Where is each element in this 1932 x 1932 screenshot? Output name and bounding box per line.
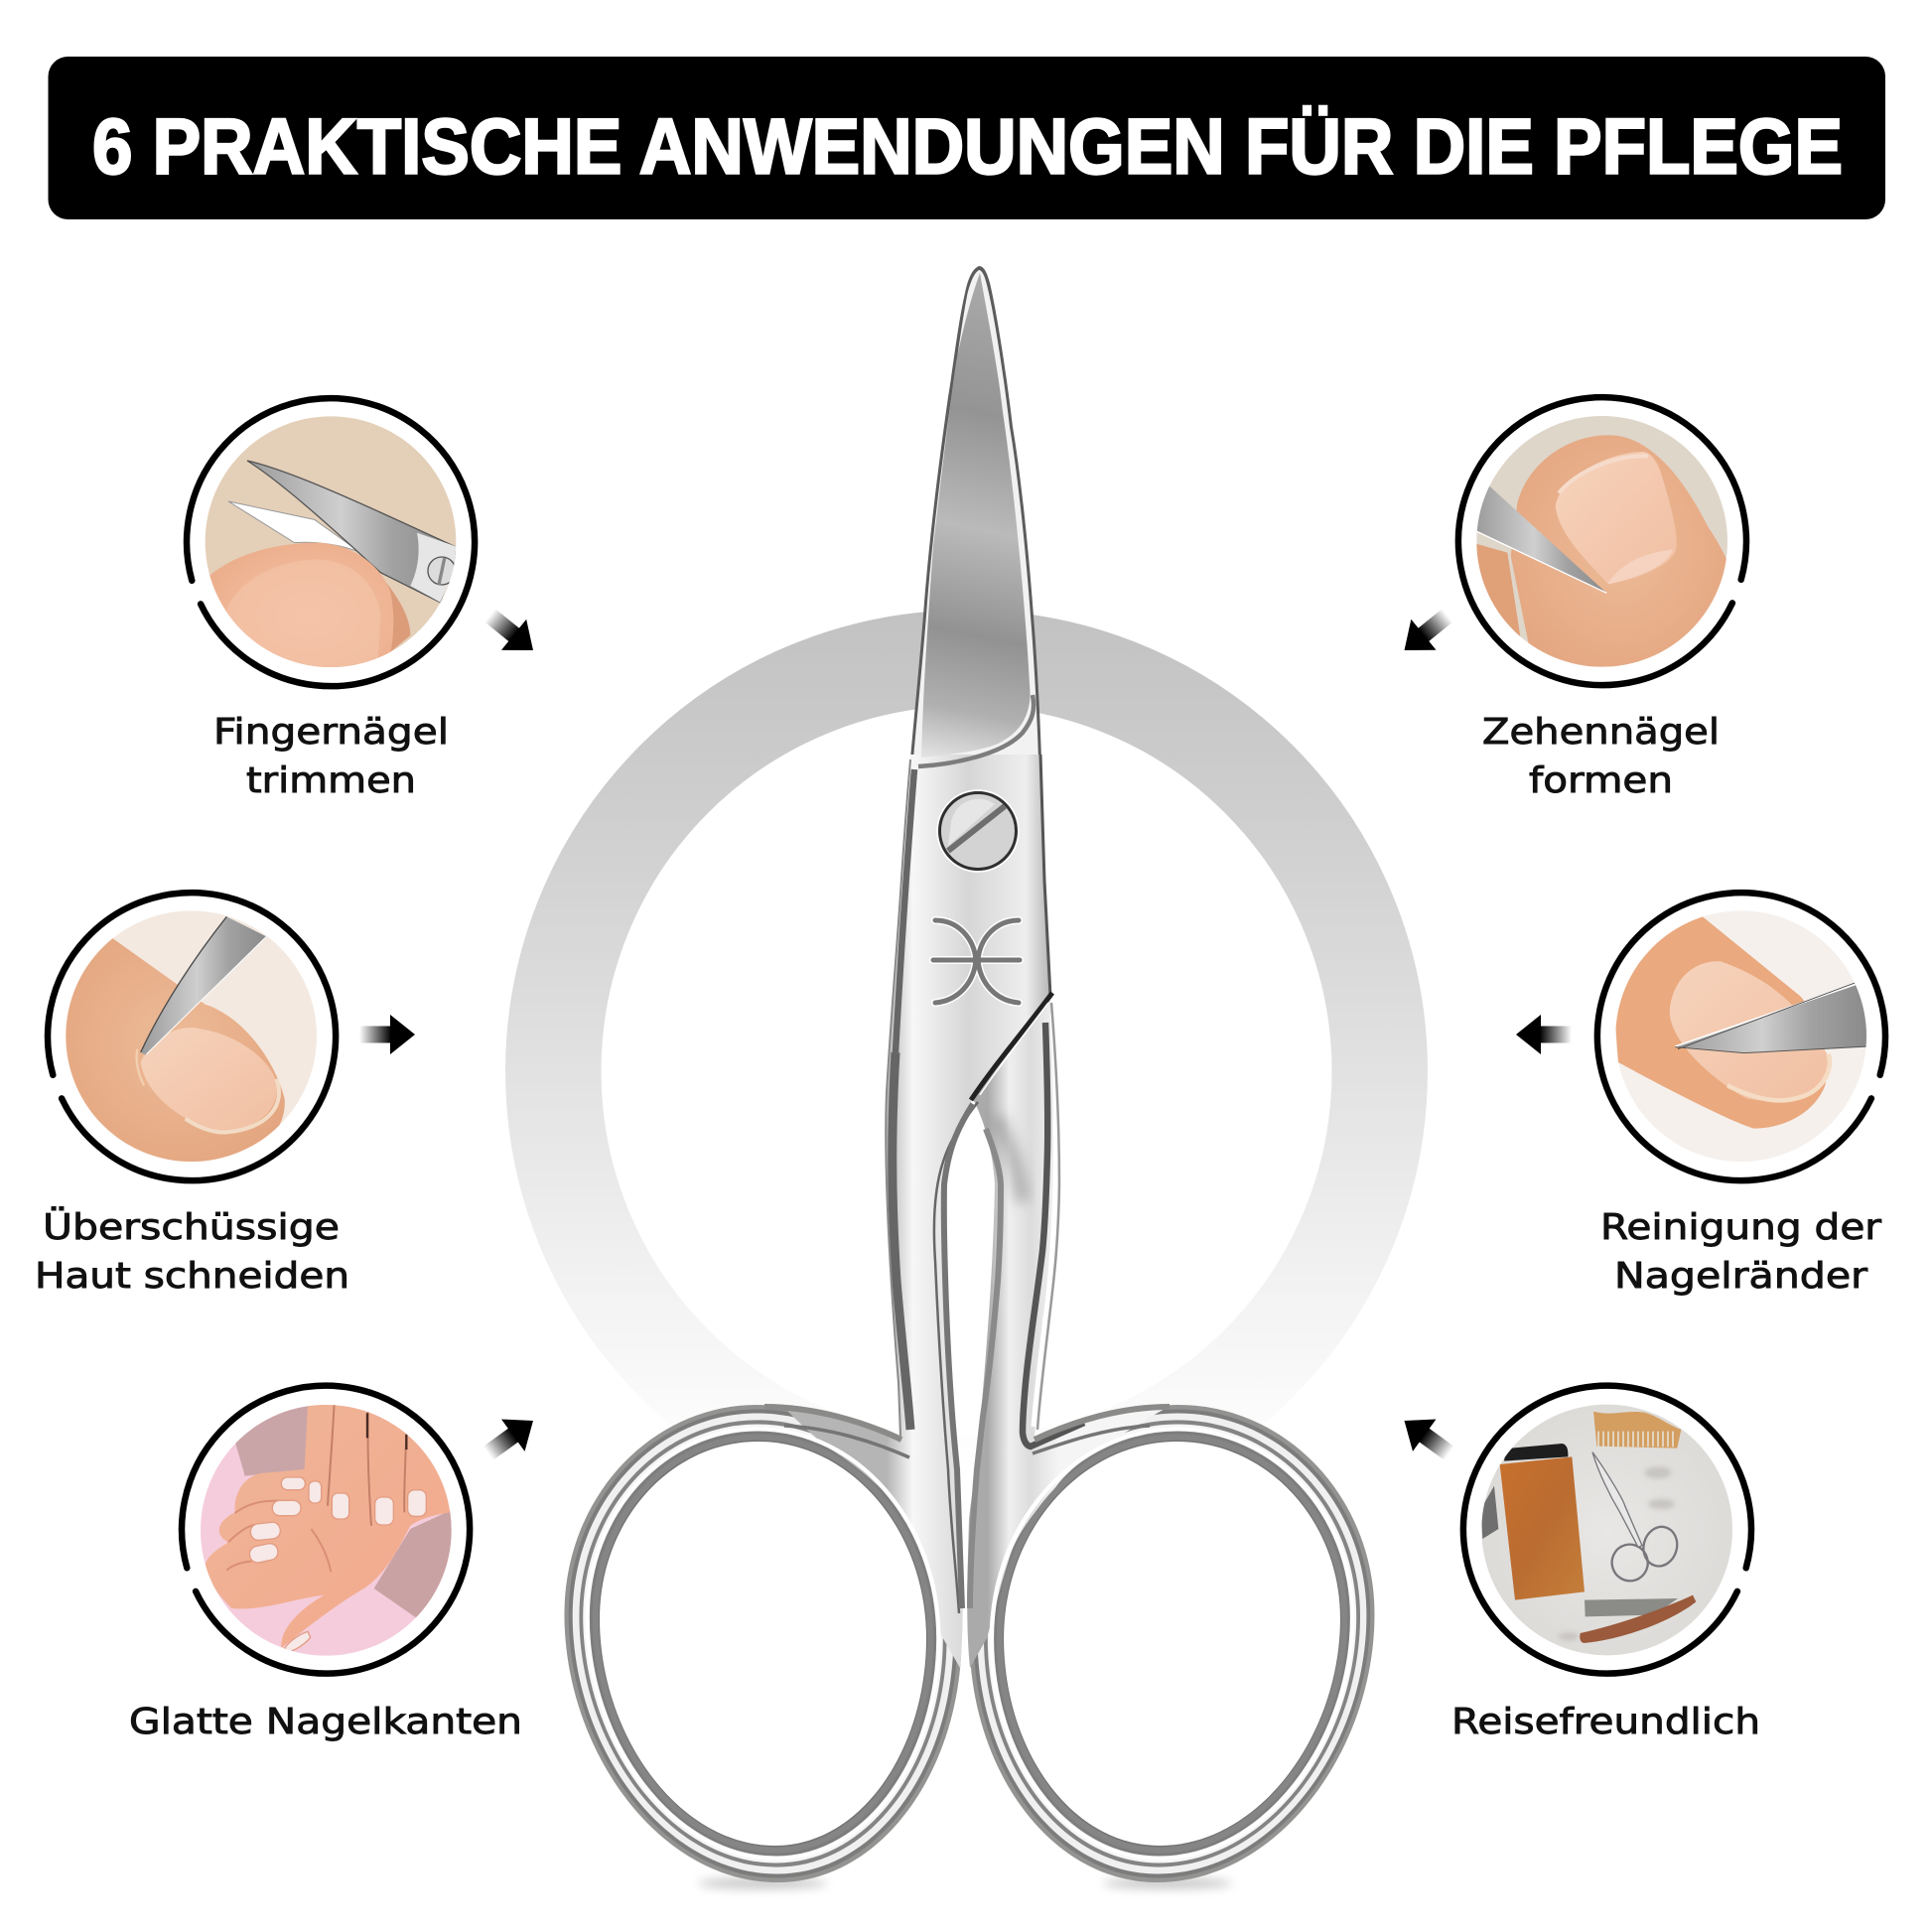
- loop inner edges over the shanks: [588, 1429, 1352, 1859]
- right shank and lower blade: [967, 998, 1167, 1668]
- ring with gap: [1463, 1386, 1751, 1674]
- photo: trimming a fingernail: [199, 410, 464, 675]
- background gradient ring: [553, 658, 1380, 1484]
- label: Haut schneiden: [35, 1256, 349, 1297]
- title banner: [48, 57, 1885, 219]
- right finger loop: [970, 1405, 1374, 1882]
- label: Reinigung der: [1600, 1207, 1881, 1248]
- ring with gap: [187, 398, 475, 686]
- label: Zehennägel: [1482, 712, 1720, 753]
- scissors ground shadow: [698, 1878, 1232, 1888]
- label: Reisefreundlich: [1451, 1702, 1760, 1742]
- upper blade base: [910, 266, 1041, 759]
- panel: Zehennägel formen: [1392, 397, 1746, 801]
- label: [1482, 712, 1720, 801]
- arrow: [1392, 600, 1460, 666]
- photo: cleaning nail edges: [1616, 911, 1866, 1162]
- panel: Überschüssige Haut schneiden: [35, 893, 415, 1297]
- photo: cutting excess skin: [66, 911, 317, 1162]
- label: Glatte Nagelkanten: [129, 1702, 522, 1742]
- label: [1600, 1207, 1881, 1297]
- label: trimmen: [246, 760, 416, 801]
- metal shading lines: [764, 755, 1170, 1613]
- panel: Reinigung der Nagelränder: [1516, 893, 1885, 1297]
- blade base curve: [918, 695, 1034, 766]
- photo: hands with smooth nails: [199, 1403, 464, 1668]
- label: [213, 712, 449, 801]
- label: Nagelränder: [1614, 1256, 1867, 1297]
- photo: travel kit flat lay: [1476, 1400, 1740, 1665]
- panel: Reisefreundlich: [1393, 1386, 1760, 1742]
- label: Überschüssige: [43, 1206, 340, 1248]
- label: formen: [1529, 760, 1673, 801]
- arrow: [1393, 1405, 1461, 1469]
- ring with gap: [1458, 397, 1746, 685]
- arrow: [478, 600, 546, 666]
- label: Fingernägel: [213, 712, 449, 753]
- arrow: [1516, 1015, 1572, 1054]
- photo: shaping a toenail: [1476, 416, 1727, 667]
- panel: Glatte Nagelkanten: [129, 1386, 545, 1742]
- ring with gap: [1597, 893, 1885, 1180]
- engraved logo: [933, 920, 1020, 1003]
- upper blade highlight strip: [913, 270, 1038, 759]
- arrow: [359, 1015, 415, 1054]
- blade face: [921, 273, 1031, 758]
- pivot screw: [937, 790, 1019, 872]
- arrow: [477, 1405, 545, 1469]
- panel: Fingernägel trimmen: [187, 398, 546, 801]
- scissors illustration: [564, 266, 1374, 1888]
- left finger loop: [564, 1405, 962, 1882]
- ring with gap: [182, 1386, 470, 1674]
- label: [35, 1206, 349, 1297]
- ring with gap: [48, 893, 336, 1180]
- body and left shank: [784, 755, 1050, 1668]
